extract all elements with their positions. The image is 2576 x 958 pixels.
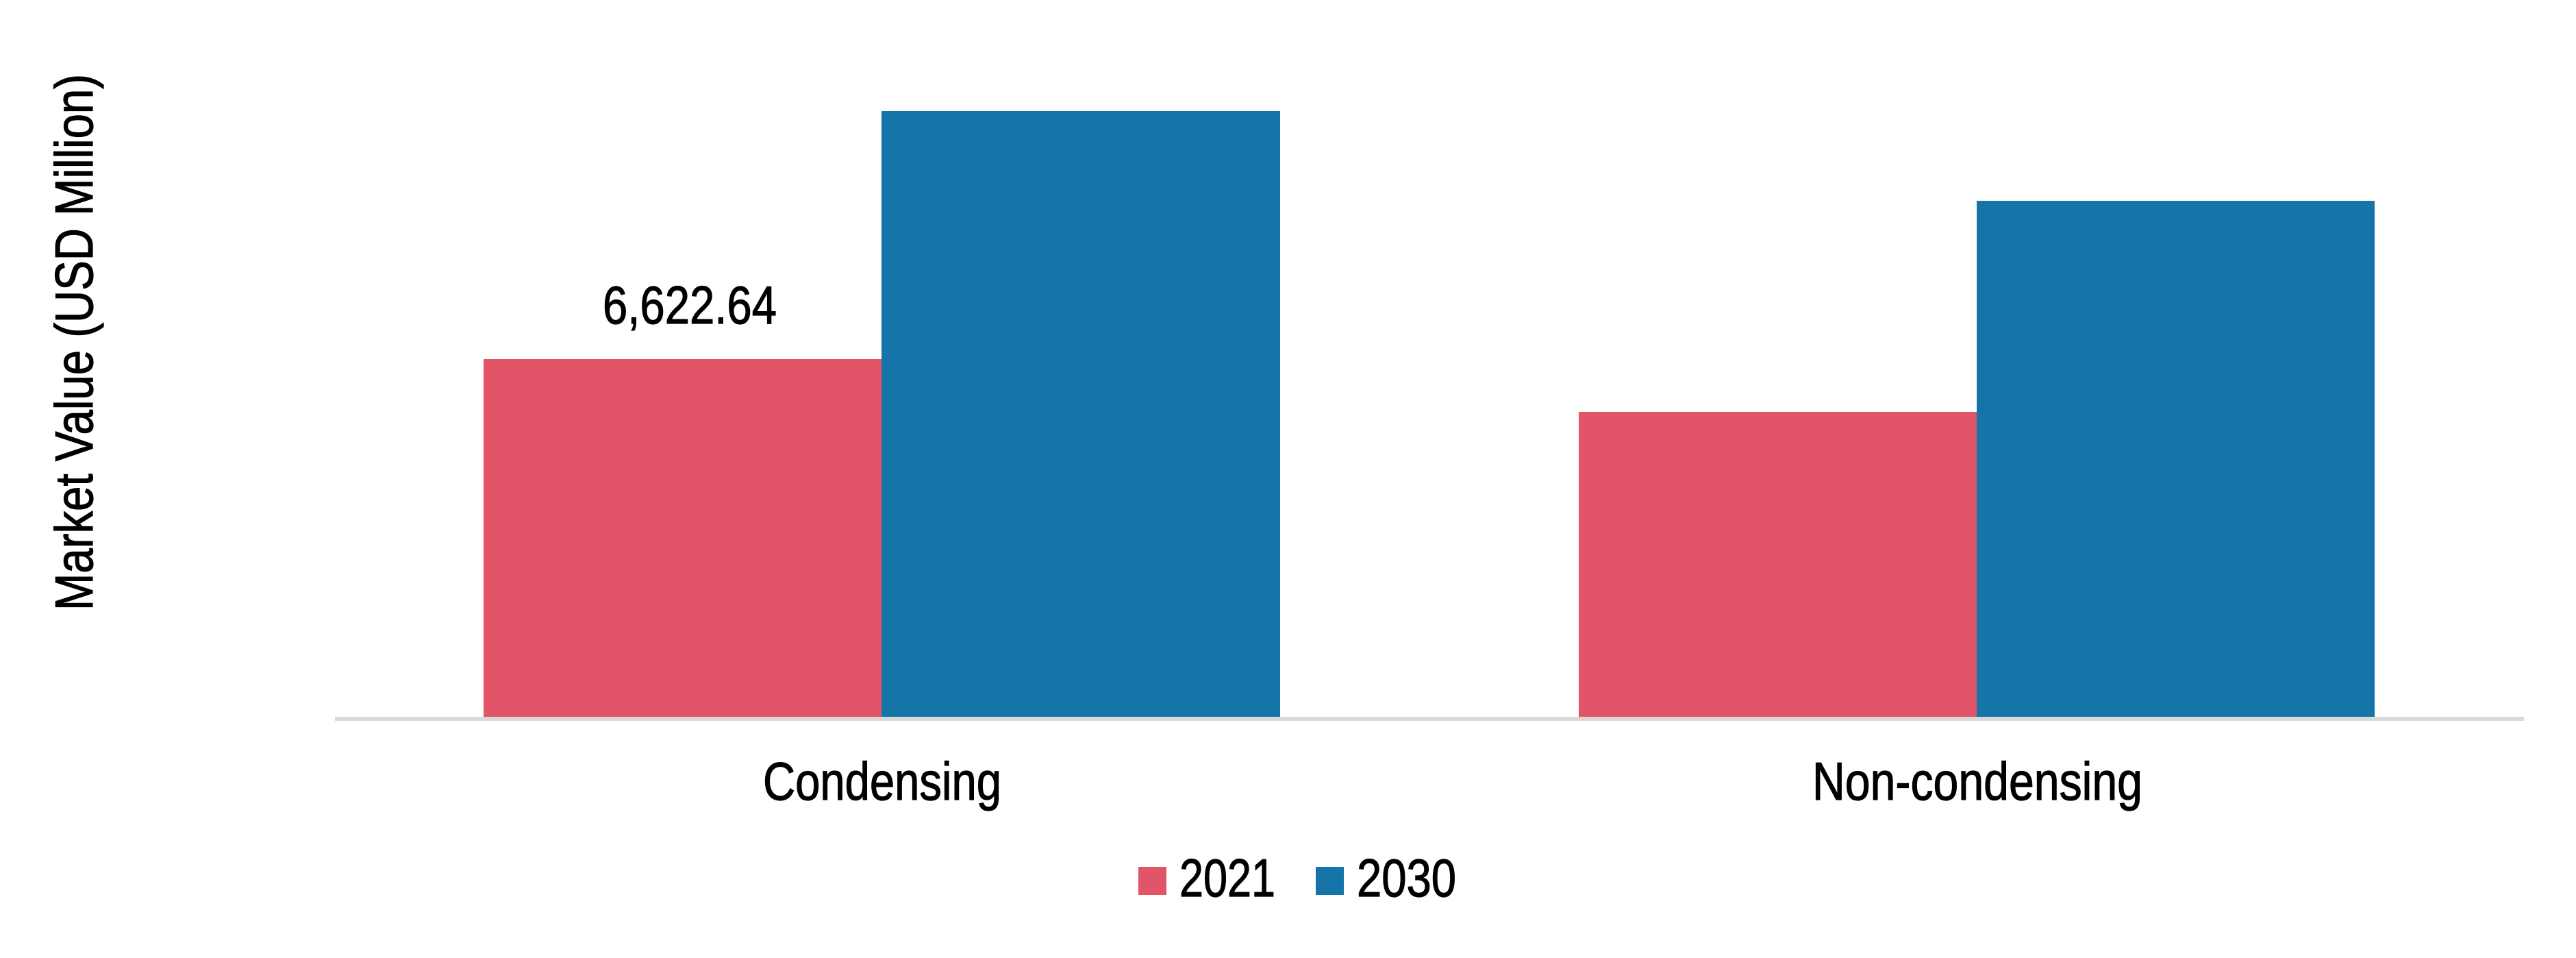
bar group: Non-condensing xyxy=(1579,201,2375,717)
bar: Non-condensing 2021 xyxy=(1579,412,1977,717)
x-axis baseline xyxy=(335,717,2524,721)
bar: Non-condensing 2030 xyxy=(1977,201,2375,717)
bar group: Condensing xyxy=(484,111,1280,717)
legend swatch: 2030 xyxy=(1316,867,1344,895)
category label: Non-condensing: Non-condensing xyxy=(1812,751,2142,811)
bar: Condensing 2021 xyxy=(484,359,881,717)
legend swatch: 2021 xyxy=(1138,867,1166,895)
legend xyxy=(1138,848,1456,908)
legend label: 2021: 2021 xyxy=(1179,848,1275,908)
legend label: 2030: 2030 xyxy=(1357,848,1456,908)
data label: Condensing 2021 value: 6,622.64 xyxy=(603,275,777,335)
bar: Condensing 2030 xyxy=(881,111,1280,717)
category label: Condensing: Condensing xyxy=(763,751,1001,811)
